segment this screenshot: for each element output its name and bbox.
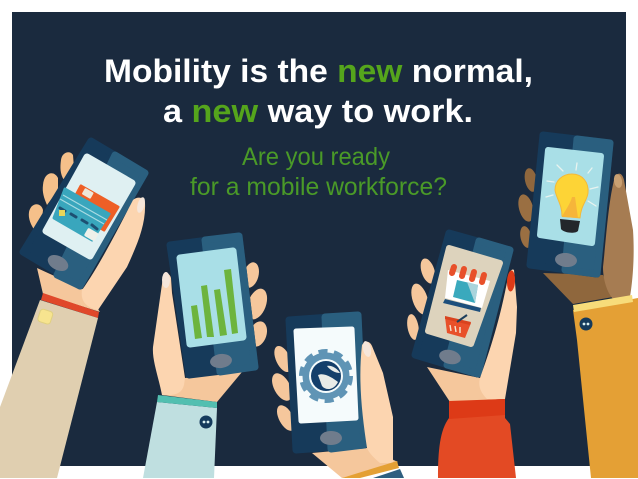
sleeve of hand 4 [438,399,516,478]
sleeve button [580,318,592,330]
phone 4 body [415,233,510,374]
cuff of hand 3 [342,461,399,478]
sleeve of hand 5 [573,298,638,478]
phone 2 body [170,236,255,375]
palm of hand 3 [312,448,398,478]
hand 1 holding phone with payment cards [0,141,146,478]
sleeve of hand 2 [143,402,217,478]
subtitle: Are you ready [242,143,390,171]
title: Mobility is the new normal, [104,53,533,89]
thumb of hand 3 [360,342,393,463]
bar chart icon [191,269,238,339]
thumb of hand 2 [153,274,185,395]
palm of hand 5 [543,273,613,304]
subtitle [190,143,447,201]
fingers of hand 2 [240,261,271,349]
hand 4 holding phone with shop [405,233,517,478]
cuff of hand 1 [41,293,99,318]
fingers of hand 4 [405,257,438,341]
sleeve button [200,416,212,428]
sleeve button [37,308,54,325]
fingers of hand 1 [29,152,74,231]
thumbnail [162,272,170,288]
hand 3 holding phone with globe gear [268,315,404,478]
thumbnail [613,173,623,189]
phone 1 body [23,141,145,286]
credit cards icon [54,186,118,241]
light bulb icon [546,163,598,233]
sleeve of hand 3 [373,469,404,478]
phone 5 body [530,135,610,274]
shop icon [443,267,490,312]
fingers of hand 5 [516,167,539,249]
thumb of hand 4 [479,269,517,399]
gear and globe icon [302,352,350,400]
phone 3 body [289,315,364,450]
thumbnail [361,340,373,358]
palm of hand 1 [37,268,100,312]
thumbnail [136,196,146,214]
cuff of hand 5 [573,295,633,312]
palm of hand 4 [427,367,505,402]
shopping basket icon [445,315,471,338]
fingers of hand 3 [268,343,299,434]
red thumbnail [506,270,516,292]
thumb of hand 1 [82,198,145,310]
cuff of hand 2 [157,395,217,408]
title [104,53,533,129]
title: a new way to work. [163,93,473,129]
hand 5 holding phone with light bulb [516,135,638,478]
palm of hand 2 [162,372,242,402]
sleeve of hand 1 [0,300,98,478]
cuff of hand 4 [449,399,505,419]
hand 2 holding phone with bar chart [143,236,271,478]
thumb of hand 5 [603,174,634,299]
subtitle: for a mobile workforce? [190,173,447,201]
